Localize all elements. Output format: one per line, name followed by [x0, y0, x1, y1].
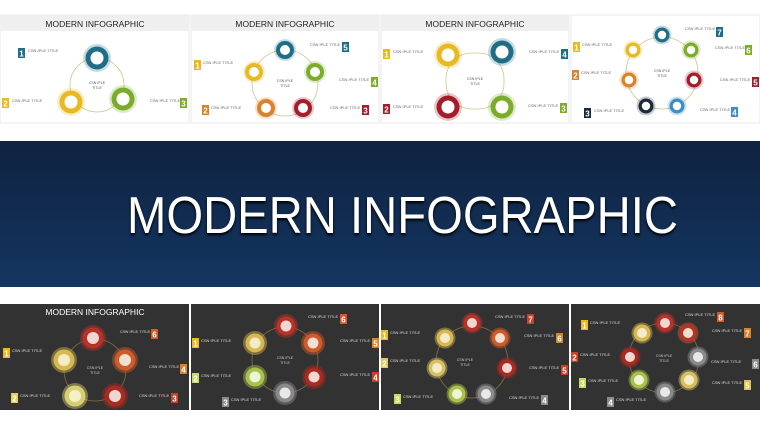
labels: CSN IPLE TITLE [340, 338, 370, 343]
labels: 4 [373, 374, 378, 382]
labels: CSN IPLE TITLE [330, 105, 360, 110]
labels: 7 [717, 28, 722, 38]
labels: 1 [382, 332, 387, 340]
labels: 5 [562, 366, 567, 376]
labels: 4 [181, 366, 186, 374]
labels [572, 26, 759, 118]
labels: CSN IPLE TITLE [310, 42, 340, 47]
panel: slide 4 light, 7 steps [571, 15, 760, 123]
labels: 2 [193, 374, 198, 384]
nodes [243, 39, 326, 119]
banner title: MODERN INFOGRAPHIC [127, 187, 678, 245]
labels: 1 [193, 340, 198, 348]
label 3 [150, 98, 187, 108]
labels [192, 314, 379, 408]
labels: CSN IPLE TITLE [390, 358, 420, 363]
labels: 3 [395, 396, 400, 404]
nodes [243, 314, 326, 405]
labels: CSN IPLE TITLE [588, 378, 618, 383]
labels: CSN IPLE TITLE [201, 373, 231, 378]
labels: 3 [561, 104, 566, 114]
labels: CSN IPLE TITLE [403, 394, 433, 399]
labels: 2 [382, 360, 387, 368]
panel: slide 3 light, 4 steps [381, 15, 569, 123]
labels: CSN IPLE TITLE [339, 77, 369, 82]
node 2 yellow [57, 88, 85, 116]
label 2 [2, 98, 42, 108]
labels: CSN IPLE TITLE [340, 372, 370, 377]
panel: slide 6 dark, 6 steps [191, 304, 379, 410]
label 1: 1 [19, 50, 24, 58]
labels: CSN IPLE TITLE [120, 329, 150, 334]
labels: 1 [195, 62, 200, 70]
panel: slide 1 light, 3 steps: MODERN INFOGRAPHIC [45, 19, 145, 29]
labels: 6 [746, 46, 751, 56]
labels: CSN IPLE TITLE [590, 320, 620, 325]
panel: slide 2 light, 5 steps: TITLE [280, 84, 290, 88]
label 2: 2 [3, 100, 8, 108]
labels: 5 [745, 382, 750, 390]
labels: 1 [4, 350, 9, 358]
nodes [434, 38, 516, 121]
node 3 green [109, 85, 137, 113]
labels: CSN IPLE TITLE [211, 105, 241, 110]
labels: 3 [172, 394, 177, 404]
label 1 [18, 48, 58, 58]
labels: CSN IPLE TITLE [685, 312, 715, 317]
labels: CSN IPLE TITLE [581, 70, 611, 75]
labels: CSN IPLE TITLE [201, 338, 231, 343]
labels: CSN IPLE TITLE [712, 328, 742, 333]
labels: 3 [363, 106, 368, 116]
labels: 2 [12, 394, 17, 404]
panel: slide 8 dark, 8 steps: CSN IPLE [656, 354, 673, 358]
labels: 3 [585, 110, 590, 118]
labels: 4 [542, 396, 547, 406]
labels: CSN IPLE TITLE [529, 49, 559, 54]
labels: 6 [341, 316, 346, 324]
panel: slide 5 dark, 5 steps [0, 304, 189, 410]
labels: CSN IPLE TITLE [594, 108, 624, 113]
labels: CSN IPLE TITLE [390, 330, 420, 335]
labels [571, 312, 759, 408]
label 2: CSN IPLE TITLE [12, 98, 42, 103]
labels: CSN IPLE TITLE [203, 60, 233, 65]
labels: 7 [745, 330, 750, 338]
labels: CSN IPLE TITLE [393, 104, 423, 109]
labels: CSN IPLE TITLE [149, 364, 179, 369]
labels: 3 [580, 380, 585, 388]
labels [194, 42, 378, 116]
labels: 4 [732, 108, 737, 118]
labels: 7 [528, 316, 533, 324]
labels: CSN IPLE TITLE [685, 26, 715, 31]
labels: 2 [384, 106, 389, 114]
labels: 2 [572, 354, 577, 362]
labels: CSN IPLE TITLE [528, 103, 558, 108]
label 3: CSN IPLE TITLE [150, 98, 180, 103]
panel: slide 8 dark, 8 steps: TITLE [659, 359, 669, 363]
labels: CSN IPLE TITLE [720, 77, 750, 82]
labels: CSN IPLE TITLE [529, 365, 559, 370]
panel: slide 7 dark, 7 steps [381, 304, 569, 410]
label 3: 3 [181, 100, 186, 108]
labels: 6 [152, 330, 157, 340]
panel: slide 8 dark, 8 steps [571, 304, 760, 410]
labels [383, 49, 568, 114]
labels: CSN IPLE TITLE [308, 314, 338, 319]
labels [381, 314, 568, 406]
labels: CSN IPLE TITLE [712, 380, 742, 385]
labels: 5 [753, 78, 758, 88]
labels: CSN IPLE TITLE [495, 314, 525, 319]
labels: CSN IPLE TITLE [711, 359, 741, 364]
labels: 6 [557, 334, 562, 344]
labels: CSN IPLE TITLE [524, 333, 554, 338]
panel: slide 3 light, 4 steps: MODERN INFOGRAPHIC [425, 19, 525, 29]
nodes [620, 26, 704, 116]
labels: CSN IPLE TITLE [616, 397, 646, 402]
panel: slide 5 dark, 5 steps: CSN IPLE [87, 366, 104, 370]
labels: CSN IPLE TITLE [231, 397, 261, 402]
labels: 5 [343, 44, 348, 52]
panel: slide 2 light, 5 steps [191, 15, 379, 123]
panel: slide 3 light, 4 steps: CSN IPLE [467, 77, 484, 81]
panel: slide 6 dark, 6 steps: TITLE [280, 361, 290, 365]
labels: CSN IPLE TITLE [509, 395, 539, 400]
panel: slide 7 dark, 7 steps: TITLE [460, 363, 470, 367]
labels: 4 [562, 50, 567, 60]
labels: CSN IPLE TITLE [582, 42, 612, 47]
panel: slide 5 dark, 5 steps: TITLE [90, 371, 100, 375]
labels: 6 [753, 360, 758, 370]
labels: 1 [574, 44, 579, 52]
labels: 3 [223, 398, 228, 408]
panel: slide 6 dark, 6 steps: CSN IPLE [277, 356, 294, 360]
labels: CSN IPLE TITLE [580, 352, 610, 357]
panel: slide 7 dark, 7 steps: CSN IPLE [457, 358, 474, 362]
panel: slide 1 light, 3 steps [0, 15, 189, 123]
labels: 4 [372, 78, 377, 88]
labels: CSN IPLE TITLE [700, 107, 730, 112]
panel: slide 2 light, 5 steps: MODERN INFOGRAPHIC [235, 19, 335, 29]
labels: 2 [203, 106, 208, 116]
labels: 1 [582, 322, 587, 330]
nodes [51, 325, 138, 409]
panel: slide 4 light, 7 steps: TITLE [657, 74, 667, 78]
nodes [426, 312, 518, 404]
labels: 1 [384, 50, 389, 60]
labels: CSN IPLE TITLE [715, 45, 745, 50]
nodes [620, 312, 708, 402]
panel: slide 2 light, 5 steps: CSN IPLE [277, 79, 294, 83]
labels: CSN IPLE TITLE [139, 393, 169, 398]
labels [3, 329, 187, 404]
panel: slide 4 light, 7 steps: CSN IPLE [654, 69, 671, 73]
labels: CSN IPLE TITLE [12, 348, 42, 353]
labels: 8 [718, 314, 723, 322]
panel: slide 1 light, 3 steps: TITLE [92, 86, 102, 90]
labels: 4 [608, 398, 613, 408]
labels: CSN IPLE TITLE [20, 393, 50, 398]
labels: 5 [373, 340, 378, 348]
label 1: CSN IPLE TITLE [28, 48, 58, 53]
node 1 teal [83, 44, 111, 72]
panel: slide 3 light, 4 steps: TITLE [470, 82, 480, 86]
panel: slide 5 dark, 5 steps: MODERN INFOGRAPHIC [45, 307, 145, 317]
labels: 2 [573, 72, 578, 80]
panel: slide 1 light, 3 steps: CSN IPLE [89, 81, 106, 85]
labels: CSN IPLE TITLE [393, 49, 423, 54]
